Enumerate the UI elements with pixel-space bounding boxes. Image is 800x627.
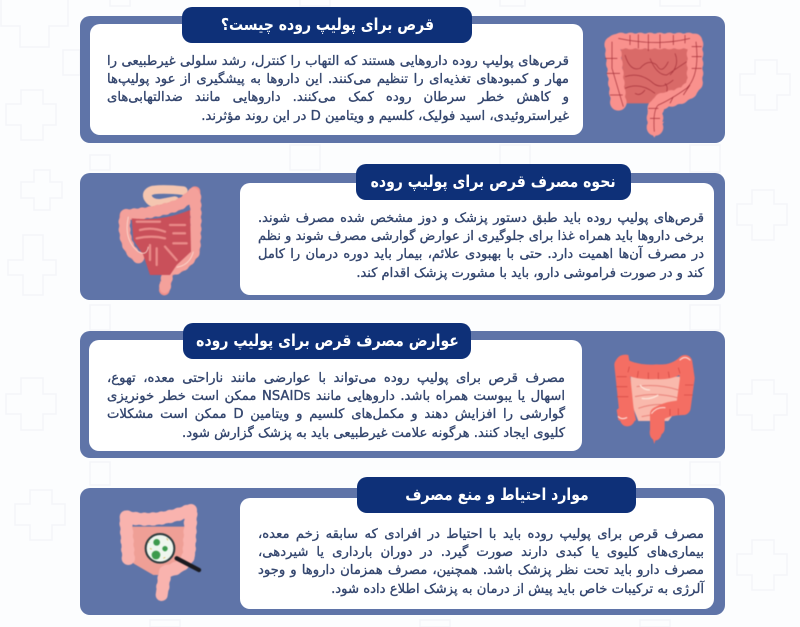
body text xyxy=(107,54,569,124)
text card xyxy=(240,183,714,295)
heading: what is the polyp pill xyxy=(182,7,472,43)
panel: how to take the pill xyxy=(80,173,725,300)
body text xyxy=(107,371,566,441)
body text: قرص‌های پولیپ روده داروهایی هستند که التهاب را کنترل، رشد سلولی غیرطبیعی را xyxy=(107,54,569,69)
body text: و کاهش خطر سرطان روده کمک می‌کنند. داروهایی مانند ضدالتهابی‌های xyxy=(107,90,569,105)
icon: colon with magnifying glass xyxy=(118,503,202,602)
heading: precautions xyxy=(357,477,636,513)
body text xyxy=(258,211,704,281)
heading: side effects xyxy=(183,323,471,359)
icon: large intestine pink xyxy=(604,32,704,138)
body text: مهار و کمبودهای تغذیه‌ای را تنظیم می‌کنند. این داروها به پیشگیری از عود پولیپ‌ها xyxy=(107,72,569,87)
panel: what is the polyp pill xyxy=(80,16,725,143)
body text: اسهال یا یبوست همراه باشد. داروهایی مانند NSAIDs ممکن است خطر خونریزی xyxy=(107,389,565,404)
heading: precautions: موارد احتیاط و منع مصرف xyxy=(405,485,588,504)
body text: کند و در صورت فراموشی دارو، باید با مشورت پزشک اقدام کند. xyxy=(356,266,704,281)
body text: بیماری‌های کلیوی یا کبدی دارند صورت گیرد. در دوران بارداری یا شیردهی، xyxy=(258,545,704,560)
body text: مصرف دارو باید تحت نظر پزشک باشد. همچنین، مصرف همزمان داروها و وجود xyxy=(258,563,704,578)
body text: غیراستروئیدی، اسید فولیک، کلسیم و ویتامین D در این روند مؤثرند. xyxy=(201,109,569,124)
body text: گوارشی را افزایش دهند و مکمل‌های کلسیم و ویتامین D ممکن است مشکلات xyxy=(107,407,565,422)
body text: آلرژی به ترکیبات خاص باید پیش از درمان به پزشک اطلاع داده شود. xyxy=(331,582,704,597)
body text: برخی داروها باید همراه غذا برای جلوگیری از عوارض گوارشی مصرف شوند و نظم xyxy=(258,229,704,244)
icon: colon red with pale small bowel xyxy=(614,354,696,444)
body text: قرص‌های پولیپ روده باید طبق دستور پزشک و دوز مشخص شده مصرف شوند. xyxy=(258,211,704,226)
body text: مصرف قرص برای پولیپ روده باید با احتیاط در افرادی که سابقه زخم معده، xyxy=(258,527,704,542)
body text xyxy=(258,527,705,597)
icon: intestines with small bowel xyxy=(118,184,202,296)
heading: how to take the pill xyxy=(356,164,631,200)
body text: کلیوی ایجاد کنند. هرگونه علامت غیرطبیعی باید به پزشک گزارش شود. xyxy=(182,426,565,441)
body text: در مصرف آن‌ها اهمیت دارد. حتی با بهبودی علائم، بیمار باید دوره درمان را کامل xyxy=(258,247,704,262)
text card xyxy=(89,340,582,451)
heading: how to take the pill: نحوه مصرف قرص برای پولیپ روده xyxy=(371,172,616,191)
panel: side effects xyxy=(80,331,725,458)
panel: precautions xyxy=(80,488,725,615)
text card xyxy=(90,24,583,135)
heading: what is the polyp pill: قرص برای پولیپ روده چیست؟ xyxy=(220,15,434,34)
body text: مصرف قرص برای پولیپ روده می‌تواند با عوارضی مانند ناراحتی معده، تهوع، xyxy=(107,371,565,386)
heading: side effects: عوارض مصرف قرص برای پولیپ روده xyxy=(196,331,458,350)
text card xyxy=(240,498,714,609)
